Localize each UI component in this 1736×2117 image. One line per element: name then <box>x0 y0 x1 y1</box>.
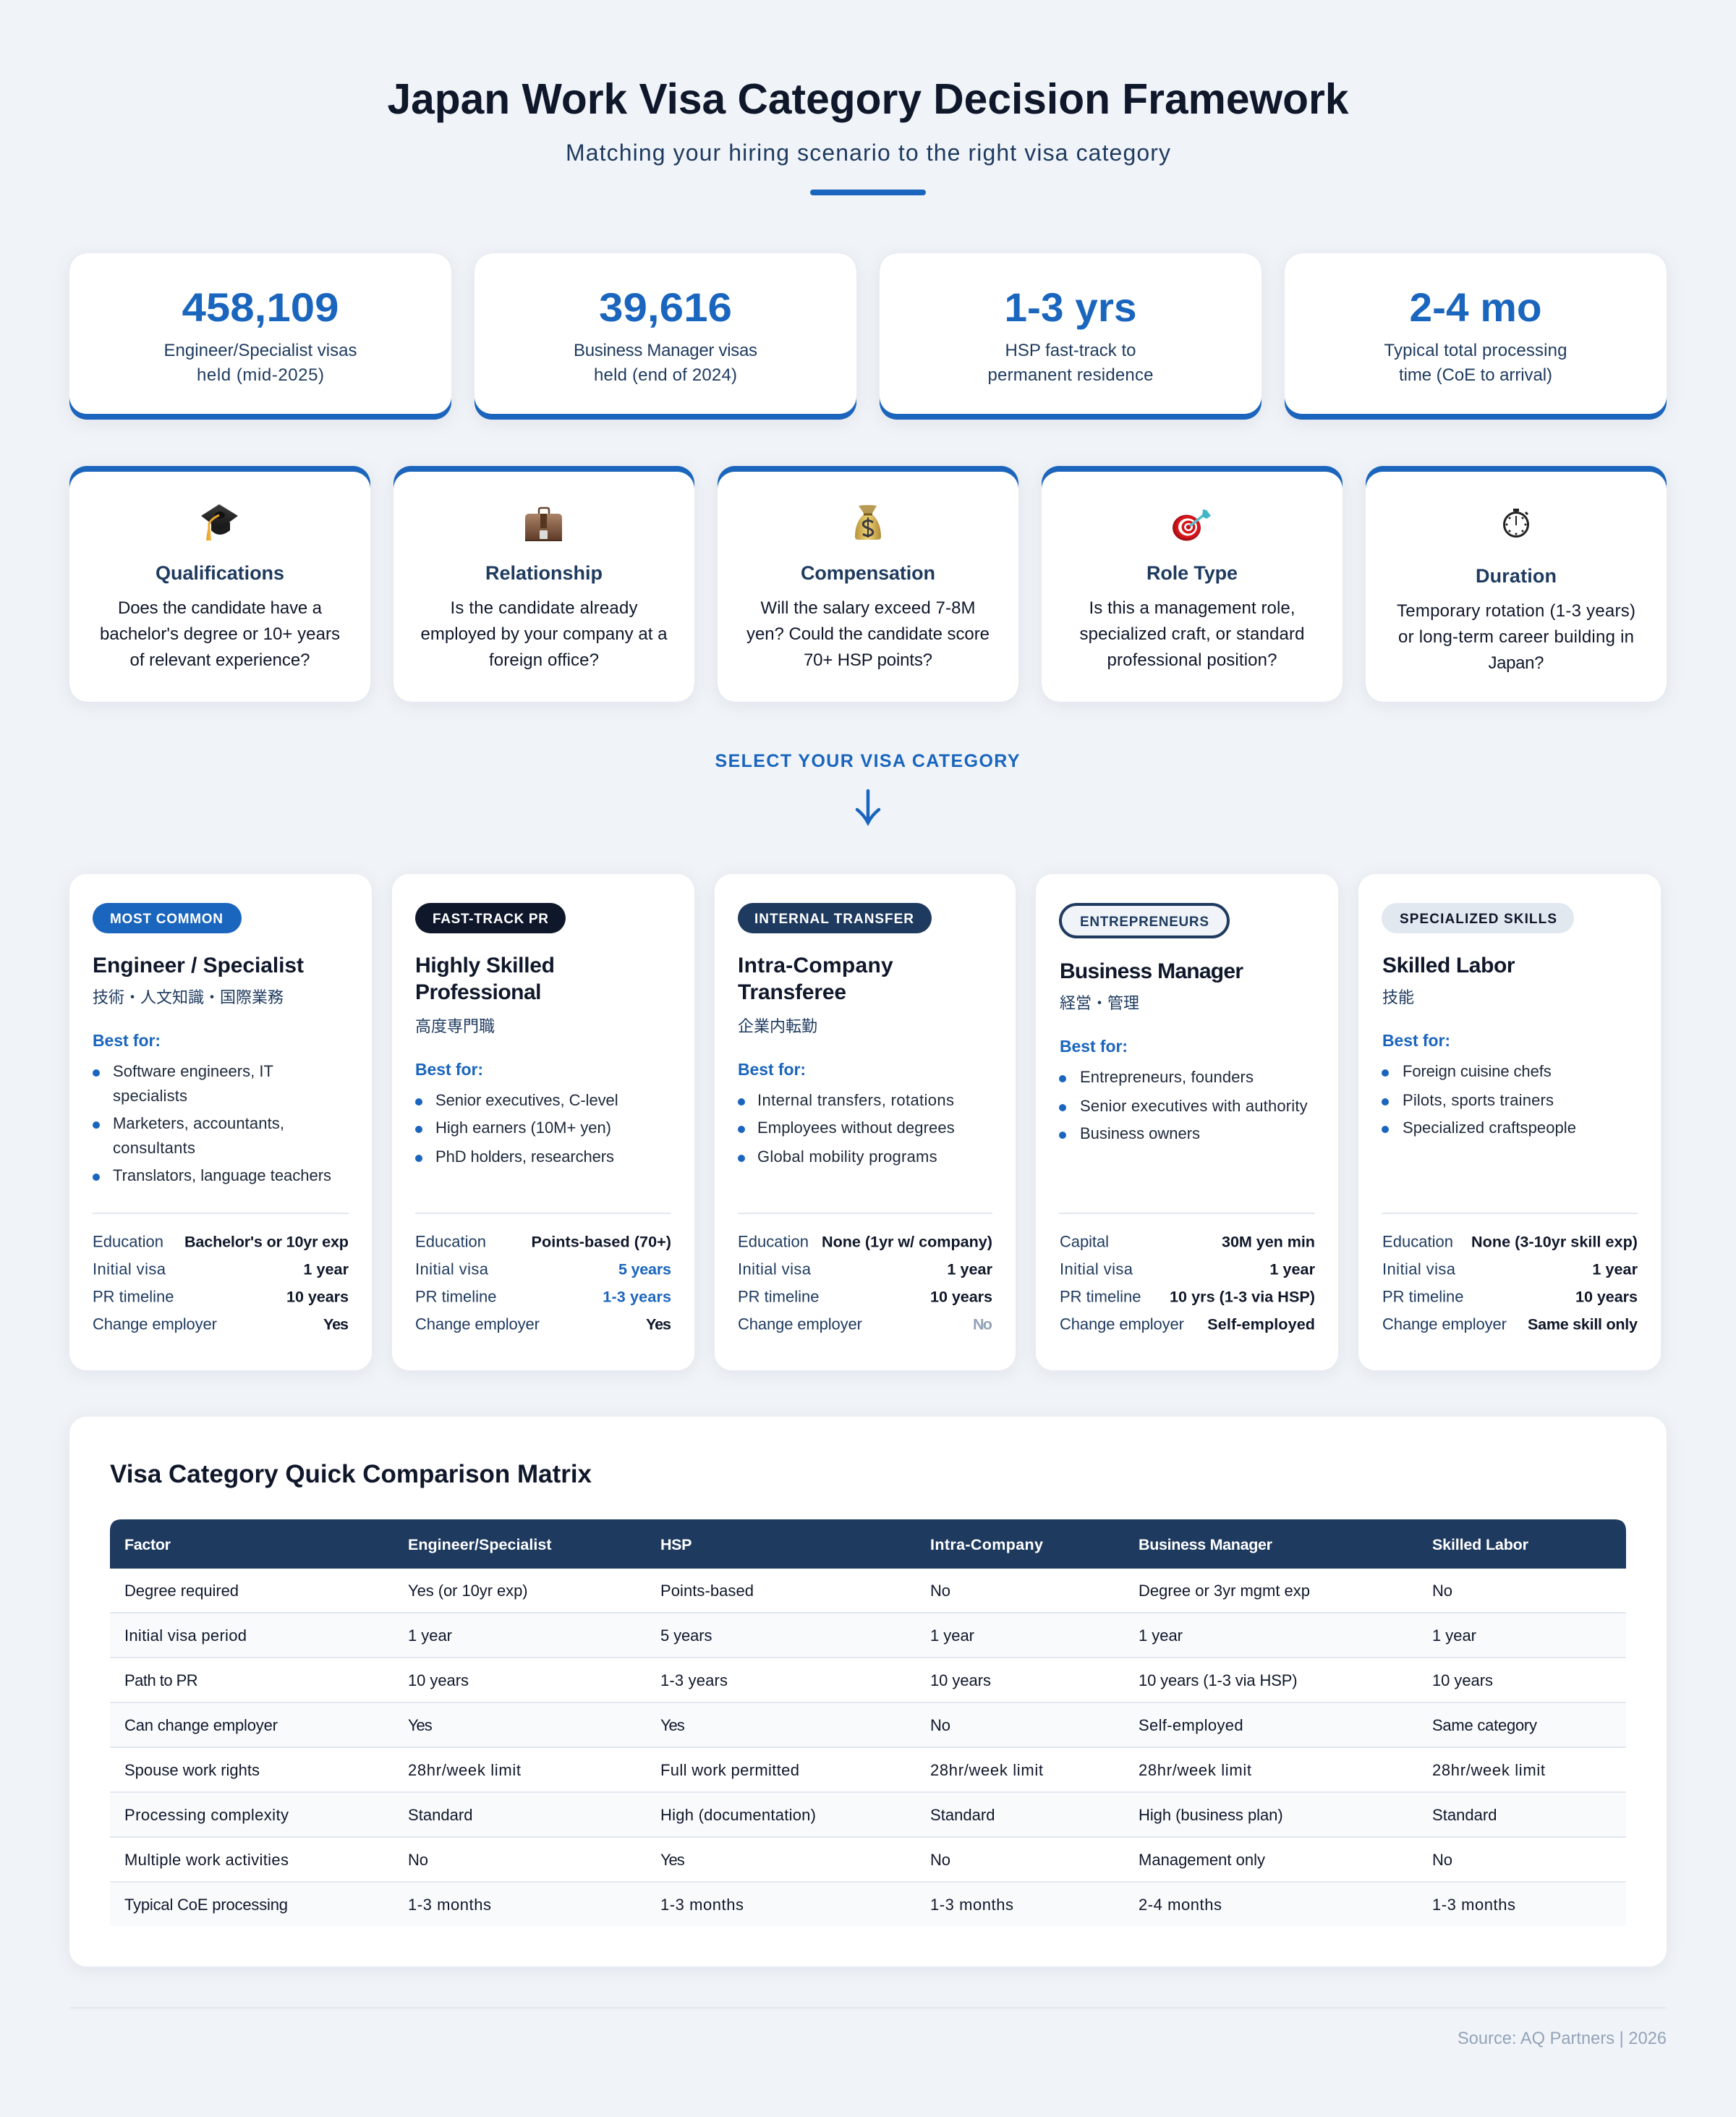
details: PR timeline <box>738 1288 819 1305</box>
row: initial visa period: 1 year <box>1139 1626 1183 1645</box>
stat card: hsp fast-track: 1-3 yrs <box>1004 284 1137 330</box>
accent bar <box>810 190 926 195</box>
details: Bachelor's or 10yr exp <box>184 1233 349 1250</box>
list: best for <box>93 1062 331 1184</box>
decision factors row <box>69 466 1667 702</box>
visa category cards <box>69 874 1661 1370</box>
row: path to pr: 1-3 years <box>660 1671 728 1689</box>
list: best for: specialists <box>113 1087 187 1105</box>
title: Japan Work Visa Category Decision Framework <box>388 75 1349 123</box>
visa card: highly skilled professional: 高度専門職 <box>415 1017 495 1035</box>
row: degree required: No <box>1432 1582 1452 1600</box>
details: 10 years <box>930 1288 992 1305</box>
factor card: duration <box>1366 466 1667 702</box>
row: spouse work rights: Full work permitted <box>660 1761 799 1779</box>
icon: money bag <box>855 505 881 540</box>
stat card: processing time: time (CoE to arrival) <box>1399 365 1552 385</box>
visa card: intra-company transferee: 企業内転勤 <box>738 1017 817 1035</box>
row: processing complexity: High (business plan) <box>1139 1806 1283 1824</box>
row: multiple work activities <box>124 1851 1452 1869</box>
factor card: relationship: employed by your company at a <box>421 624 668 644</box>
row: can change employer <box>124 1716 1537 1734</box>
stat card: business manager visas: Business Manager visas <box>574 341 757 360</box>
row: path to pr: 10 years <box>408 1671 469 1689</box>
row: multiple work activities: Yes <box>660 1851 685 1869</box>
factor card: duration: Duration <box>1476 565 1557 587</box>
factor card: compensation: Compensation <box>801 562 935 584</box>
row: initial visa period: 1 year <box>930 1626 974 1645</box>
list: best for: High earners (10M+ yen) <box>435 1119 611 1137</box>
row: typical coe processing: 1-3 months <box>408 1896 491 1914</box>
visa card: highly skilled professional: Professional <box>415 980 541 1004</box>
details: 5 years <box>618 1260 671 1278</box>
table header: HSP <box>660 1536 692 1553</box>
details: Initial visa <box>1382 1260 1456 1278</box>
details: PR timeline <box>1382 1288 1464 1305</box>
factor card: qualifications: bachelor's degree or 10+ years <box>100 624 340 644</box>
list: best for: Translators, language teachers <box>113 1166 331 1184</box>
row: spouse work rights <box>124 1761 1545 1779</box>
icon: briefcase <box>525 508 562 541</box>
icon: graduation cap <box>201 504 238 540</box>
list: best for: Software engineers, IT <box>113 1062 273 1080</box>
row: path to pr <box>124 1671 1493 1689</box>
details: Change employer <box>738 1315 862 1333</box>
visa card: skilled labor: 技能 <box>1382 988 1414 1006</box>
row: multiple work activities: Management only <box>1139 1851 1265 1869</box>
details: 1 year <box>1592 1260 1638 1278</box>
factor card: qualifications: Does the candidate have a <box>118 598 323 618</box>
details: Change employer <box>1060 1315 1184 1333</box>
list: best for: Internal transfers, rotations <box>757 1091 954 1109</box>
details: Change employer <box>415 1315 540 1333</box>
factor card: role type: professional position? <box>1107 650 1277 670</box>
factor card: role type <box>1042 466 1343 702</box>
factor card: compensation: yen? Could the candidate score <box>746 624 990 644</box>
row: path to pr: 10 years (1-3 via HSP) <box>1139 1671 1298 1689</box>
details: None (1yr w/ company) <box>822 1233 992 1250</box>
list: best for: PhD holders, researchers <box>435 1147 614 1166</box>
row: processing complexity <box>124 1806 1497 1824</box>
details: 30M yen min <box>1222 1233 1315 1250</box>
row: processing complexity: Standard <box>408 1806 473 1824</box>
factor card: qualifications: of relevant experience? <box>130 650 310 670</box>
badge: specialized skills <box>1382 903 1574 933</box>
table header: Engineer/Specialist <box>408 1536 551 1553</box>
details: 1 year <box>303 1260 349 1278</box>
row: can change employer: No <box>930 1716 950 1734</box>
list: best for: Employees without degrees <box>757 1119 955 1137</box>
stat card: engineer specialist visas: held (mid-2025) <box>197 365 324 385</box>
visa card: skilled labor: Skilled Labor <box>1382 954 1515 977</box>
row: typical coe processing: 1-3 months <box>930 1896 1013 1914</box>
stat card: engineer specialist visas: Engineer/Specialist visas <box>163 341 357 360</box>
details: Initial visa <box>415 1260 489 1278</box>
details: 1-3 years <box>603 1288 671 1305</box>
row: degree required: Degree required <box>124 1582 239 1600</box>
details: 10 years <box>286 1288 349 1305</box>
visa card: highly skilled professional <box>392 874 694 1370</box>
stat card: processing time: Typical total processing <box>1384 341 1567 360</box>
row: typical coe processing: 1-3 months <box>660 1896 744 1914</box>
row: multiple work activities: No <box>408 1851 428 1869</box>
table header: Skilled Labor <box>1432 1536 1529 1553</box>
details: Self-employed <box>1207 1315 1315 1333</box>
header <box>388 75 1349 195</box>
stat card: engineer specialist visas <box>69 253 451 420</box>
row: spouse work rights: 28hr/week limit <box>930 1761 1043 1779</box>
factor card: duration: Japan? <box>1489 653 1544 673</box>
factor card: relationship <box>393 466 694 702</box>
details: Change employer <box>1382 1315 1507 1333</box>
row: multiple work activities: No <box>1432 1851 1452 1869</box>
details: Education <box>738 1233 809 1250</box>
row: can change employer: Yes <box>660 1716 685 1734</box>
stat card: business manager visas: held (end of 2024) <box>594 365 737 385</box>
details: PR timeline <box>93 1288 174 1305</box>
details: Yes <box>323 1315 349 1333</box>
row: spouse work rights: 28hr/week limit <box>408 1761 521 1779</box>
details: Initial visa <box>1060 1260 1133 1278</box>
row: path to pr: 10 years <box>930 1671 991 1689</box>
row: path to pr: 10 years <box>1432 1671 1493 1689</box>
badge: specialized skills: SPECIALIZED SKILLS <box>1400 912 1557 927</box>
details: Change employer <box>93 1315 217 1333</box>
row: initial visa period: Initial visa period <box>124 1626 247 1645</box>
details: 10 yrs (1-3 via HSP) <box>1170 1288 1315 1305</box>
factor card: compensation <box>718 466 1018 702</box>
stat card: hsp fast-track: permanent residence <box>988 365 1153 385</box>
row: degree required: Points-based <box>660 1582 754 1600</box>
row: multiple work activities: Multiple work activities <box>124 1851 289 1869</box>
details: Points-based (70+) <box>531 1233 671 1250</box>
details: Education <box>1382 1233 1453 1250</box>
visa card: engineer specialist: Engineer / Specialist <box>93 954 304 977</box>
arrow: down <box>857 791 879 823</box>
factor card: relationship: Is the candidate already <box>450 598 638 618</box>
row: degree required: Degree or 3yr mgmt exp <box>1139 1582 1310 1600</box>
stat card: hsp fast-track: HSP fast-track to <box>1005 341 1136 360</box>
list: best for <box>1382 1062 1576 1137</box>
details: Same skill only <box>1528 1315 1638 1333</box>
factor card: duration: or long-term career building in <box>1398 627 1634 647</box>
details <box>93 1233 349 1333</box>
row: path to pr: Path to PR <box>124 1671 198 1689</box>
details <box>415 1233 671 1333</box>
details: Education <box>93 1233 163 1250</box>
details <box>738 1233 993 1333</box>
factor card: role type: specialized craft, or standard <box>1079 624 1305 644</box>
list: best for: Senior executives with authority <box>1080 1097 1308 1115</box>
stat card: business manager visas <box>475 253 856 420</box>
list: best for: Senior executives, C-level <box>435 1091 618 1109</box>
details: 1 year <box>947 1260 993 1278</box>
details: 1 year <box>1269 1260 1316 1278</box>
list: best for: Specialized craftspeople <box>1403 1119 1576 1137</box>
details: Capital <box>1060 1233 1109 1250</box>
visa card: skilled labor <box>1358 874 1661 1370</box>
table header <box>110 1519 1626 1569</box>
factor card: compensation: Will the salary exceed 7-8M <box>761 598 975 618</box>
list: best for: consultants <box>113 1139 195 1157</box>
details: Yes <box>646 1315 671 1333</box>
details: PR timeline <box>415 1288 496 1305</box>
visa card: engineer specialist: Best for: <box>93 1031 161 1050</box>
visa card: intra-company transferee: Intra-Company <box>738 954 893 977</box>
row: processing complexity: High (documentation) <box>660 1806 816 1824</box>
list: best for <box>415 1091 618 1166</box>
factor card: relationship: foreign office? <box>489 650 599 670</box>
badge: internal transfer <box>738 903 932 933</box>
list: best for: Entrepreneurs, founders <box>1080 1068 1254 1086</box>
row: multiple work activities: No <box>930 1851 950 1869</box>
badge: entrepreneurs: ENTREPRENEURS <box>1080 915 1209 930</box>
badge: fast-track pr: FAST-TRACK PR <box>433 912 548 927</box>
badge: most common <box>93 903 242 933</box>
factor card: qualifications <box>69 466 370 702</box>
row: initial visa period: 1 year <box>1432 1626 1476 1645</box>
panel: comparison matrix <box>69 1417 1667 1967</box>
list: best for <box>1059 1068 1308 1142</box>
table header: Intra-Company <box>930 1536 1043 1553</box>
visa card: intra-company transferee: Best for: <box>738 1060 806 1079</box>
stat card: engineer specialist visas: 458,109 <box>182 284 339 330</box>
factor card: role type: Role Type <box>1146 562 1238 584</box>
list: best for <box>738 1091 955 1166</box>
subtitle: Matching your hiring scenario to the right visa category <box>566 140 1170 166</box>
factor card: role type: Is this a management role, <box>1089 598 1295 618</box>
stat card: hsp fast-track <box>880 253 1261 420</box>
row: spouse work rights: 28hr/week limit <box>1139 1761 1251 1779</box>
factor card: relationship: Relationship <box>485 562 603 584</box>
visa card: business manager: Best for: <box>1060 1037 1128 1056</box>
visa card: highly skilled professional: Highly Skilled <box>415 954 555 977</box>
row: can change employer: Yes <box>408 1716 433 1734</box>
row: can change employer: Self-employed <box>1139 1716 1243 1734</box>
details: PR timeline <box>1060 1288 1141 1305</box>
visa card: intra-company transferee <box>715 874 1016 1370</box>
list: best for: Global mobility programs <box>757 1147 937 1166</box>
details <box>1060 1233 1316 1333</box>
row: spouse work rights: 28hr/week limit <box>1432 1761 1545 1779</box>
row: typical coe processing <box>124 1896 1515 1914</box>
list: best for: Business owners <box>1080 1124 1200 1142</box>
visa card: business manager: 経営・管理 <box>1060 994 1139 1012</box>
badge: entrepreneurs <box>1060 904 1228 937</box>
stat card: business manager visas: 39,616 <box>599 284 732 330</box>
table header: Business Manager <box>1139 1536 1273 1553</box>
list: best for: Foreign cuisine chefs <box>1403 1062 1552 1080</box>
visa card: highly skilled professional: Best for: <box>415 1060 483 1079</box>
row: typical coe processing: 1-3 months <box>1432 1896 1515 1914</box>
section label: SELECT YOUR VISA CATEGORY <box>715 751 1020 771</box>
list: best for: Pilots, sports trainers <box>1403 1091 1554 1109</box>
stat card: processing time <box>1285 253 1667 420</box>
visa card: business manager <box>1036 874 1338 1370</box>
badge: fast-track pr <box>415 903 566 933</box>
badge: internal transfer: INTERNAL TRANSFER <box>754 912 914 927</box>
visa card: business manager: Business Manager <box>1060 959 1243 983</box>
row: initial visa period: 5 years <box>660 1626 712 1645</box>
row: degree required: No <box>930 1582 950 1600</box>
factor card: compensation: 70+ HSP points? <box>804 650 932 670</box>
row: typical coe processing: 2-4 months <box>1139 1896 1222 1914</box>
row: processing complexity: Standard <box>930 1806 995 1824</box>
factor card: qualifications: Qualifications <box>156 562 284 584</box>
matrix heading: Visa Category Quick Comparison Matrix <box>110 1460 592 1488</box>
row: initial visa period <box>124 1626 1476 1645</box>
list: best for: Marketers, accountants, <box>113 1114 284 1132</box>
source footer: Source: AQ Partners | 2026 <box>1458 2029 1667 2048</box>
row: can change employer: Same category <box>1432 1716 1537 1734</box>
table stripes <box>110 1613 1626 1926</box>
icon: stopwatch <box>1505 509 1528 537</box>
row: processing complexity: Standard <box>1432 1806 1497 1824</box>
details: Initial visa <box>738 1260 812 1278</box>
visa card: skilled labor: Best for: <box>1382 1031 1450 1050</box>
row: can change employer: Can change employer <box>124 1716 278 1734</box>
row: initial visa period: 1 year <box>408 1626 452 1645</box>
details: No <box>973 1315 992 1333</box>
details: Initial visa <box>93 1260 166 1278</box>
badge: most common: MOST COMMON <box>110 912 223 927</box>
details <box>1382 1233 1638 1333</box>
details: 10 years <box>1575 1288 1638 1305</box>
row: degree required <box>124 1582 1452 1600</box>
visa card: intra-company transferee: Transferee <box>738 980 846 1004</box>
icon: dart target <box>1173 509 1211 541</box>
visa card: engineer specialist <box>69 874 372 1370</box>
table header: Factor <box>124 1536 171 1553</box>
details: Education <box>415 1233 486 1250</box>
row: typical coe processing: Typical CoE processing <box>124 1896 288 1914</box>
row: spouse work rights: Spouse work rights <box>124 1761 260 1779</box>
stat card: processing time: 2-4 mo <box>1409 284 1542 330</box>
details: None (3-10yr skill exp) <box>1471 1233 1638 1250</box>
visa card: engineer specialist: 技術・人文知識・国際業務 <box>93 988 284 1006</box>
stats row <box>69 253 1667 420</box>
row: processing complexity: Processing complexity <box>124 1806 289 1824</box>
row: degree required: Yes (or 10yr exp) <box>408 1582 528 1600</box>
factor card: duration: Temporary rotation (1-3 years) <box>1397 601 1635 621</box>
